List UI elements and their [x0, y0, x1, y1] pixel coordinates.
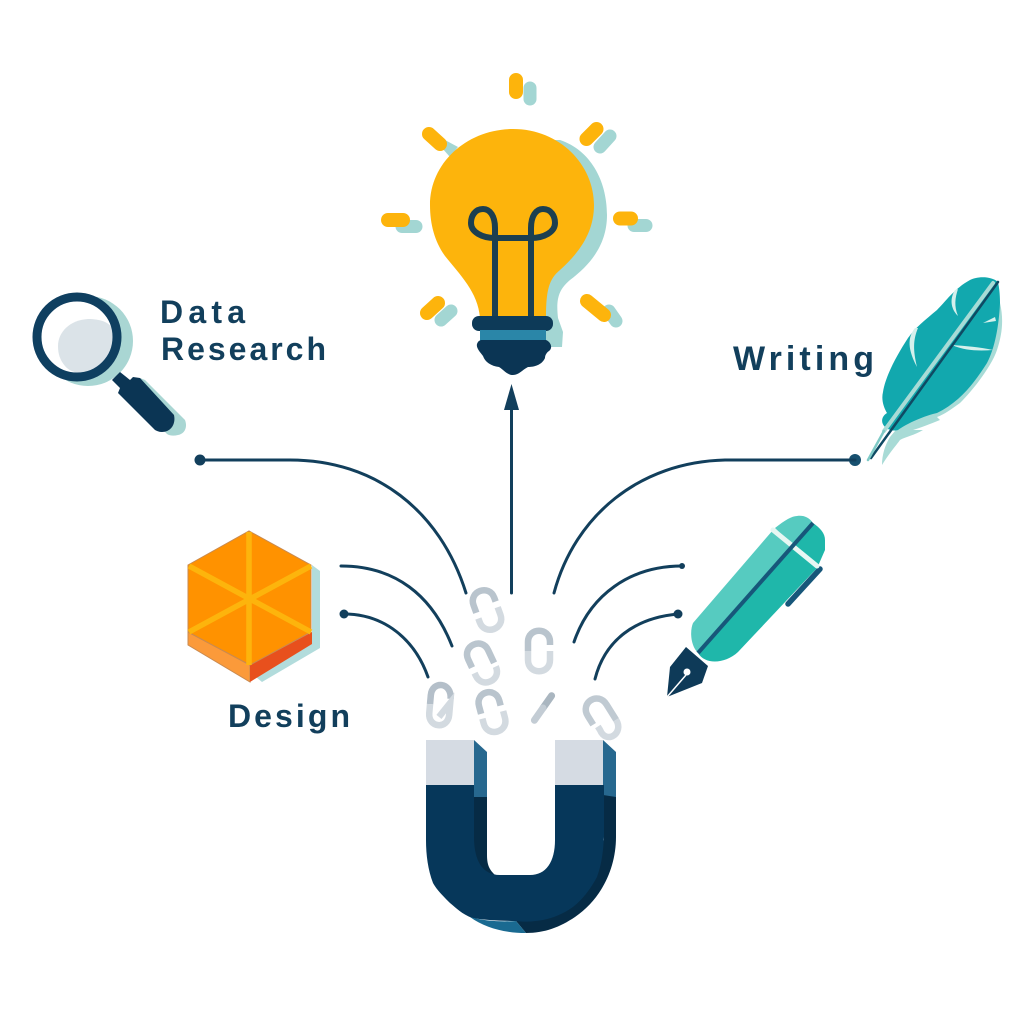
label: Writing: Writing — [733, 340, 874, 378]
arrow: centre arrow to bulb — [504, 384, 519, 593]
feather shadow — [882, 303, 1002, 465]
magnet right pole tip — [555, 740, 603, 785]
filament — [471, 209, 555, 318]
connector: writing line — [554, 454, 861, 593]
label: Data Research — [160, 294, 326, 367]
hexagon right side — [250, 632, 312, 682]
magnifier shadow — [43, 296, 133, 386]
pen clip — [788, 569, 820, 604]
label: Design: Design — [228, 698, 350, 734]
bulb glass — [430, 129, 594, 318]
feather vane — [882, 277, 1000, 431]
magnet front — [426, 785, 604, 922]
label: Data Research: Research — [161, 331, 326, 367]
magnet bottom facet — [470, 917, 526, 933]
link 7 — [582, 694, 622, 742]
magnet right outer side dark — [516, 785, 616, 933]
label: Data Research: Data — [160, 294, 245, 330]
hexagon left side — [188, 632, 250, 682]
magnet inner side dark — [470, 785, 495, 880]
pen nib — [667, 647, 708, 697]
icon: feather — [868, 277, 1002, 465]
magnet right pole side — [603, 740, 616, 797]
hexagon spokes — [189, 532, 311, 665]
pen barrel — [691, 530, 793, 653]
feather quill — [868, 282, 998, 460]
pen cap — [775, 516, 813, 546]
link 6 — [534, 696, 552, 720]
connector: design lower arc — [340, 610, 428, 677]
connector: design upper arc — [341, 566, 452, 646]
magnet left pole side — [474, 740, 487, 797]
icon: design hexagon — [188, 531, 320, 682]
icon: light bulb — [388, 80, 646, 375]
hexagon shadow — [250, 565, 320, 682]
feather notches — [910, 289, 996, 367]
icon: horseshoe magnet — [426, 740, 616, 933]
bulb base — [472, 316, 553, 375]
icon: magnifying glass — [37, 296, 186, 436]
magnet left pole tip — [426, 740, 474, 785]
bulb rays — [388, 80, 631, 315]
chain links — [428, 587, 622, 742]
link 5 — [476, 690, 508, 734]
pen band — [773, 530, 817, 566]
bulb ray shadows — [402, 88, 646, 321]
link 1 — [470, 587, 504, 633]
connector: pen upper arc — [574, 563, 685, 642]
connector: pen lower arc — [595, 610, 682, 679]
bulb shadow — [530, 140, 607, 347]
handle — [112, 372, 174, 432]
link 2 — [463, 640, 501, 686]
icon: fountain pen — [667, 516, 825, 697]
pen centre line — [698, 523, 813, 653]
lens — [39, 299, 115, 375]
hexagon top face — [188, 531, 311, 665]
link 4 — [428, 684, 452, 726]
link 3 — [528, 631, 550, 671]
connector: data research line — [194, 454, 466, 593]
